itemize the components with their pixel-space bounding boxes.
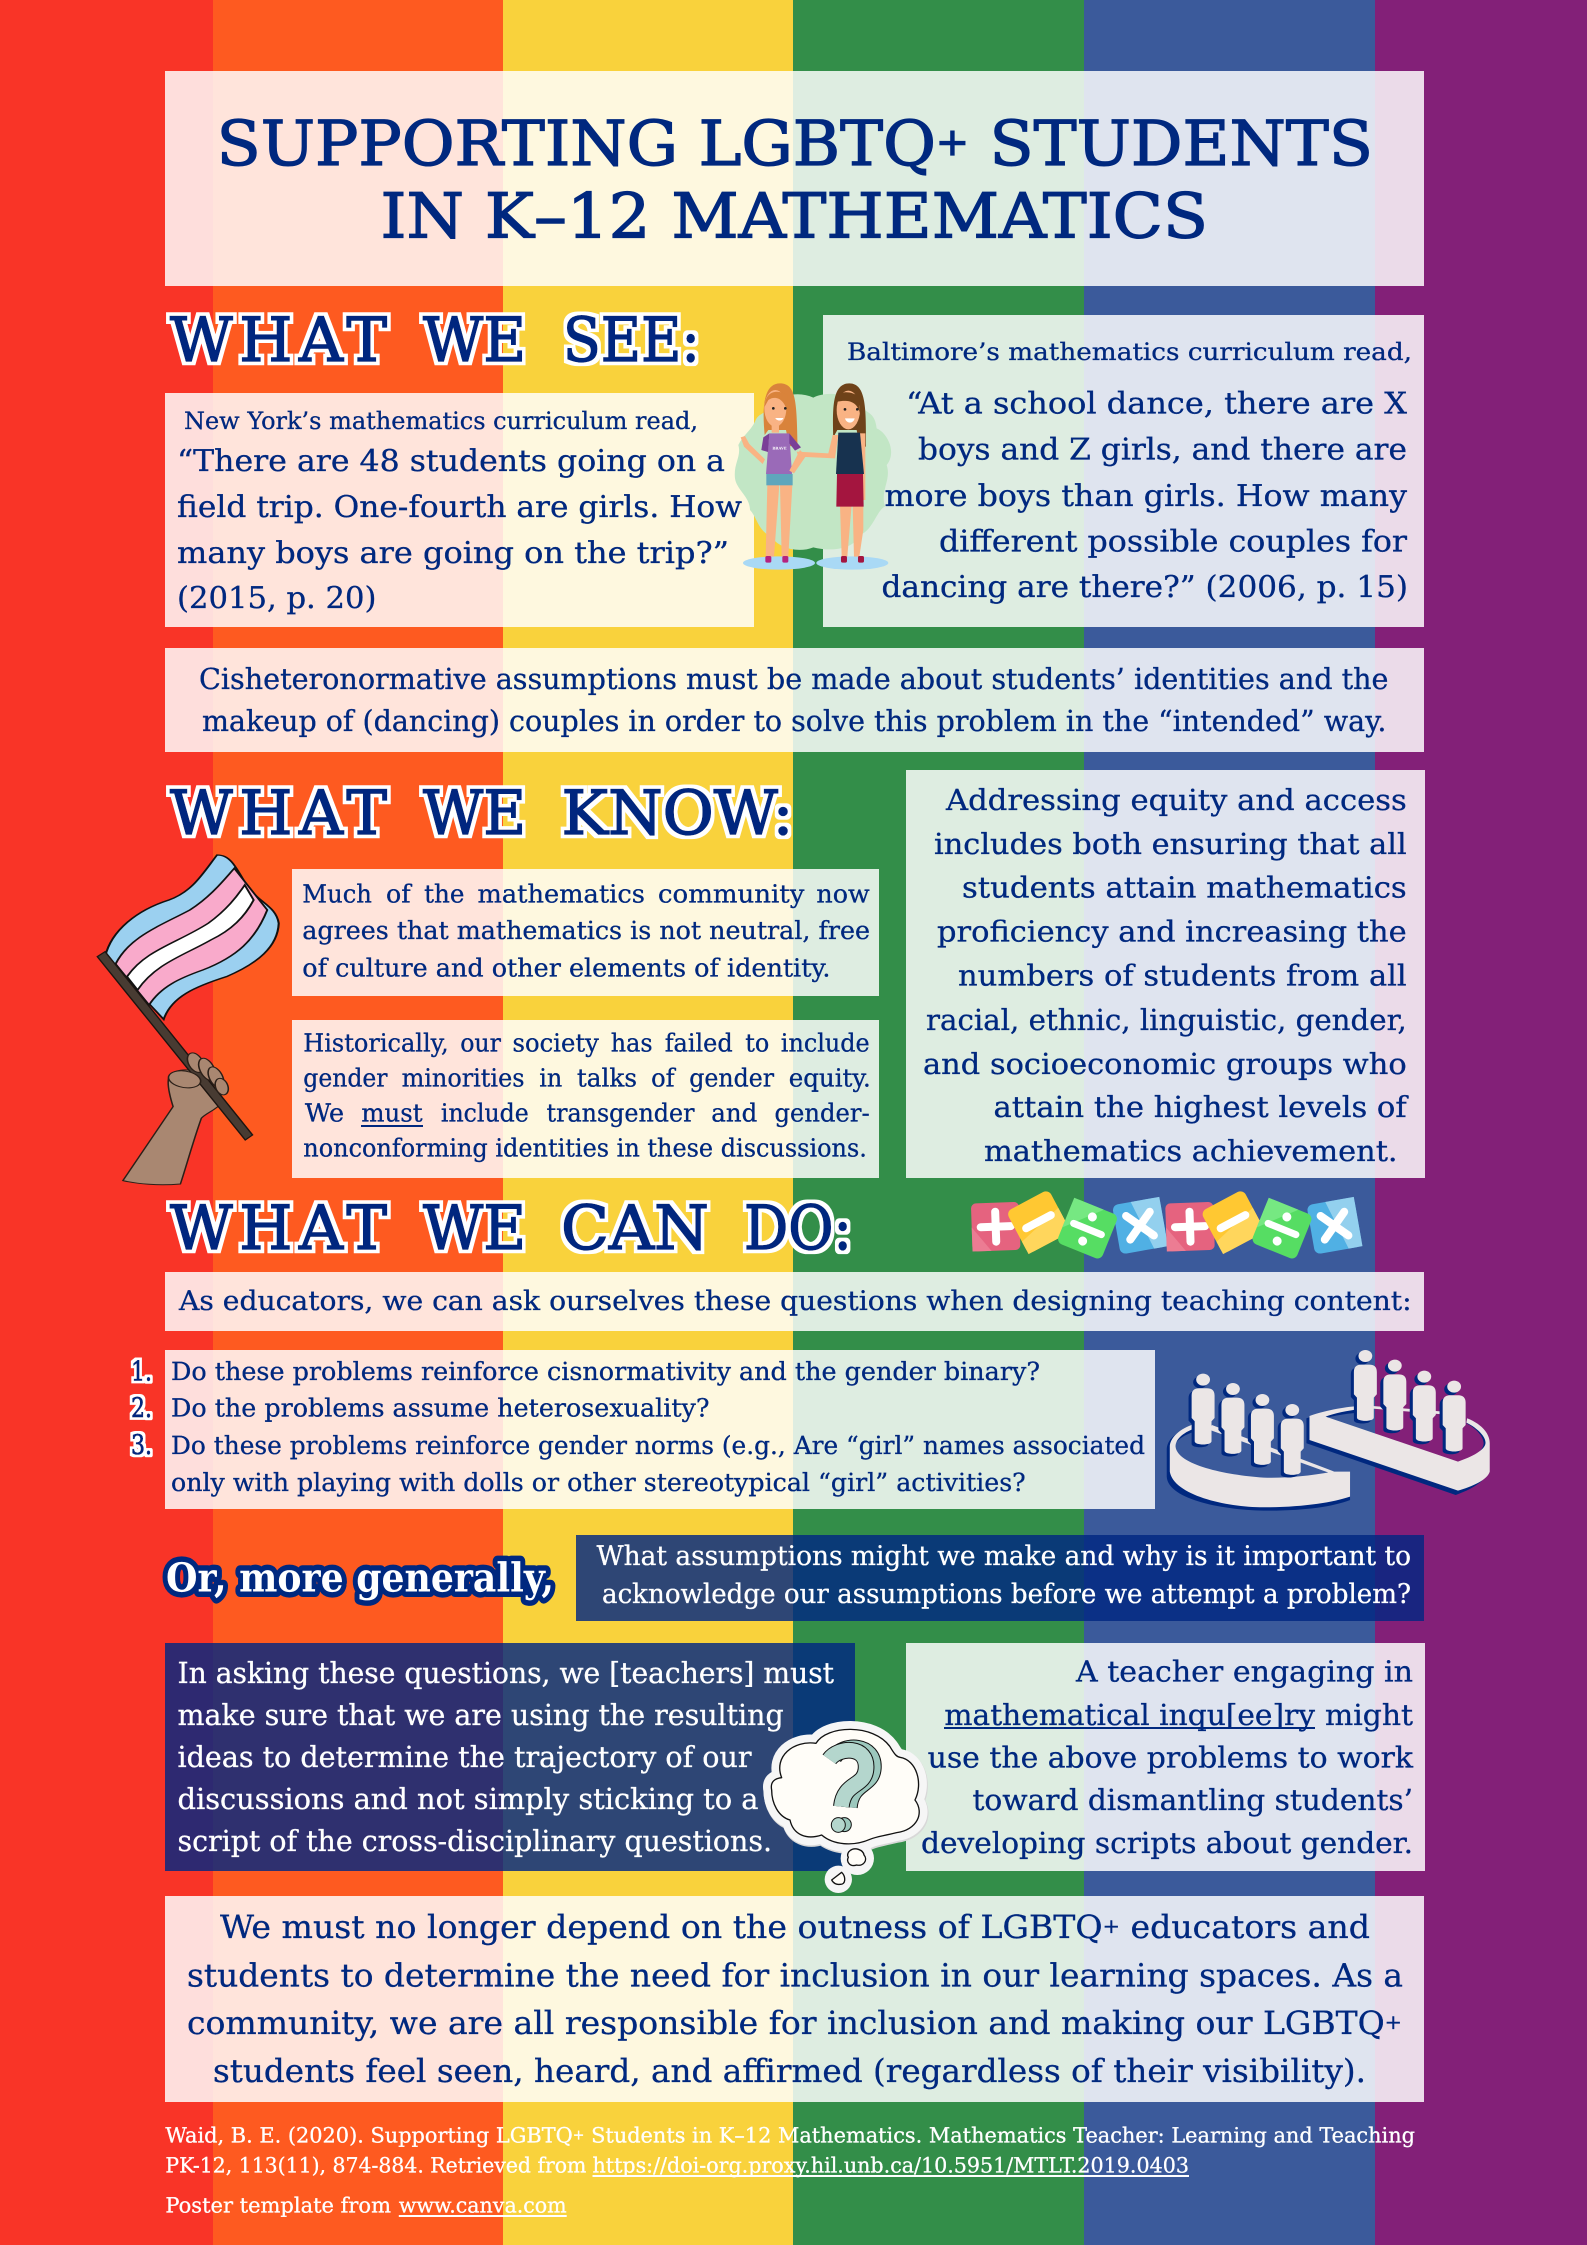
heading: what we can do: WE — [423, 1193, 526, 1264]
heading: what we can do: CAN — [561, 1193, 709, 1264]
callout heading: or, more generally: Or, more generally, — [166, 1555, 554, 1602]
panel: closing statement: educators and — [1120, 1908, 1370, 1946]
numbered markers: 2. — [131, 1393, 152, 1424]
panel: asking these questions — [165, 1643, 855, 1871]
girl two — [797, 383, 866, 563]
panel: gender minorities in equity talks: gender — [689, 1064, 774, 1092]
title: + — [936, 120, 969, 164]
title — [165, 71, 1424, 286]
panel: question list: only with playing with dolls or other stereotypical “girl” activities? — [171, 1468, 1026, 1497]
heading: what we see — [170, 305, 700, 376]
panel: equity and access: and socioeconomic groups who — [923, 1047, 1407, 1081]
panel: New York curriculum quote — [165, 393, 754, 627]
panel: closing statement: + — [1103, 1914, 1120, 1938]
panel: mathematical inqueery — [906, 1643, 1425, 1871]
panel: mathematics is not neutral: Much — [302, 880, 372, 909]
heading: what we see: SEE: — [563, 305, 700, 376]
panel: gender minorities in equity talks: include — [441, 1098, 529, 1128]
citation footer: Poster template from — [165, 2194, 391, 2218]
panel: mathematics is not neutral: the — [424, 880, 464, 909]
panel: equity and access: racial, ethnic, linguistic, gender, — [926, 1003, 1407, 1037]
title: STUDENTS — [969, 107, 1373, 180]
panel: cisheteronormative assumptions: Cisheteronormative assumptions must be made about students’ identities and the — [199, 662, 1388, 696]
panel: assumptions question: What assumptions might we make and why is it important to — [596, 1541, 1411, 1572]
panel: gender minorities in equity talks: Historically, — [303, 1028, 449, 1058]
numbered markers: 3. — [131, 1430, 152, 1461]
heading: what we see: WHAT — [170, 305, 387, 376]
citation footer: www.canva.com — [399, 2194, 567, 2218]
citation footer: PK-12, 113(11), 874-884. Retrieved from — [165, 2154, 586, 2178]
panel: Baltimore curriculum quote: more boys than girls. How many — [884, 479, 1407, 514]
panel: gender minorities in equity talks: and — [711, 1098, 757, 1128]
panel: equity and access: numbers of students from all — [958, 959, 1407, 993]
panel: Baltimore curriculum quote: boys and Z girls, and there are — [918, 432, 1407, 468]
icon: thought bubble with question mark — [771, 1729, 920, 1893]
panel: mathematics is not neutral: of — [386, 880, 412, 909]
panel: asking these questions: script of the cross-disciplinary questions. — [178, 1824, 772, 1858]
icon: two groups of people on platforms — [1167, 1350, 1490, 1511]
numbered markers: 1. — [131, 1357, 152, 1388]
heading: what we can do: WHAT — [170, 1193, 387, 1264]
citation footer: Students in K–12 Mathematics. Mathematics Teacher: Learning and Teaching — [584, 2124, 1415, 2148]
icon: two students — [735, 383, 891, 570]
panel: equity and access: Addressing equity and access — [945, 783, 1407, 817]
panel: gender minorities in equity talks: our — [460, 1028, 501, 1058]
panel: equity and access: students attain mathematics — [962, 871, 1407, 905]
panel: gender minorities in equity talks: in — [539, 1064, 562, 1092]
panel: cisheteronormative assumptions — [165, 648, 1424, 752]
panel: asking these questions: ideas to determine the trajectory of our — [178, 1740, 752, 1774]
panel: assumptions question — [576, 1535, 1424, 1621]
girl one — [741, 383, 806, 563]
panel: equity and access: includes both ensuring that all — [934, 827, 1407, 861]
panel: New York curriculum quote: New York’s mathematics curriculum read, — [184, 407, 698, 435]
panel: gender minorities in equity talks: failed — [665, 1028, 733, 1058]
heading: what we can do: DO: — [744, 1193, 852, 1264]
panel: gender minorities in equity talks: nonconforming identities in these discussions. — [303, 1134, 867, 1162]
panel: Baltimore curriculum quote — [823, 315, 1424, 627]
numbered markers — [131, 1357, 152, 1461]
panel: closing statement: students to determine the need for inclusion in our learning spaces. As a — [187, 1957, 1403, 1995]
icon: row of math operator tiles — [971, 1189, 1362, 1260]
panel: assumptions question: acknowledge our assumptions before we attempt a problem? — [602, 1579, 1411, 1610]
panel: Baltimore curriculum quote: dancing are there?” (2006, p. 15) — [882, 570, 1408, 605]
panel: mathematics is not neutral: of culture and other elements of identity. — [302, 954, 830, 982]
panel: mathematical inqueery: developing scripts about gender. — [921, 1826, 1413, 1860]
panel: Baltimore curriculum quote: Baltimore’s mathematics curriculum read, — [847, 338, 1412, 366]
citation footer: https://doi-org.proxy.hil.unb.ca/10.5951/MTLT.2019.0403 — [592, 2154, 1189, 2178]
panel: gender minorities in equity talks: include — [781, 1028, 870, 1058]
panel: closing statement: students feel seen, heard, and affirmed (regardless of their visibility). — [213, 2052, 1366, 2090]
panel: question list — [165, 1350, 1155, 1509]
panel: question list: Do the problems assume heterosexuality? — [171, 1394, 710, 1423]
panel: equity and access: proficiency and increasing the — [937, 915, 1407, 949]
title: SUPPORTING LGBTQ — [217, 107, 909, 180]
heading: what we know: WE — [423, 778, 526, 849]
panel: Baltimore curriculum quote: “At a school dance, there are X — [906, 386, 1408, 422]
panel: New York curriculum quote: many boys are going on the trip?” — [177, 536, 729, 571]
panel: gender minorities in equity talks: equity. — [789, 1064, 871, 1092]
icon: hand holding transgender pride flag — [97, 855, 279, 1185]
panel: gender minorities in equity talks — [292, 1020, 879, 1178]
panel: mathematics is not neutral — [292, 869, 879, 996]
panel: gender minorities in equity talks: to — [745, 1028, 769, 1058]
panel: gender minorities in equity talks: We — [305, 1098, 344, 1128]
panel: mathematical inqueery: might — [1325, 1698, 1413, 1732]
heading: what we know — [170, 778, 794, 849]
citation footer — [165, 2124, 1415, 2218]
panel: closing statement: + — [1385, 2010, 1402, 2034]
panel: New York curriculum quote: (2015, p. 20) — [177, 581, 376, 616]
panel: question list: Do these problems reinforce cisnormativity and the gender binary? — [171, 1357, 1040, 1386]
panel: educators prompt — [165, 1272, 1424, 1331]
shirt print: BRAVE — [772, 446, 787, 450]
panel: asking these questions: discussions and not simply sticking to a — [178, 1782, 758, 1816]
panel: closing statement — [165, 1896, 1424, 2102]
heading: what we see: WE — [423, 305, 526, 376]
panel: gender minorities in equity talks: gender — [303, 1064, 388, 1092]
citation footer: + — [573, 2128, 584, 2144]
panel: equity and access — [906, 770, 1425, 1178]
title: IN K–12 MATHEMATICS — [380, 180, 1208, 252]
panel: mathematics is not neutral: mathematics — [478, 880, 645, 909]
panel: question list: Do these problems reinforce gender norms (e.g., Are “girl” names associated — [171, 1431, 1145, 1460]
heading: what we can do — [170, 1193, 852, 1264]
heading: what we know: KNOW: — [562, 778, 794, 849]
panel: equity and access: attain the highest levels of — [994, 1090, 1409, 1124]
panel: New York curriculum quote: field trip. One-fourth are girls. How — [177, 490, 742, 525]
panel: gender minorities in equity talks: has — [611, 1028, 653, 1058]
panel: gender minorities in equity talks: transgender — [546, 1098, 695, 1128]
panel: mathematics is not neutral: agrees that mathematics is not neutral, free — [302, 916, 870, 945]
panel: mathematical inqueery: toward dismantling students’ — [972, 1783, 1413, 1817]
panel: gender minorities in equity talks: society — [512, 1028, 600, 1058]
panel: cisheteronormative assumptions: makeup of (dancing) couples in order to solve this problem in the “intended” way. — [202, 704, 1386, 738]
heading: what we know: WHAT — [170, 778, 387, 849]
panel: closing statement: We must no longer depend on the outness of LGBTQ — [220, 1908, 1072, 1946]
panel: Baltimore curriculum quote: different possible couples for — [939, 525, 1408, 560]
citation footer: Waid, B. E. (2020). Supporting LGBTQ — [165, 2124, 575, 2148]
panel: gender minorities in equity talks: must — [361, 1098, 423, 1128]
panel: mathematical inqueery: mathematical inqu[ee]ry — [944, 1698, 1316, 1732]
panel: gender minorities in equity talks: gender- — [774, 1098, 870, 1128]
panel: mathematical inqueery: use the above problems to work — [928, 1741, 1413, 1775]
panel: gender minorities in equity talks: talks — [577, 1064, 637, 1092]
panel: New York curriculum quote: “There are 48 students going on a — [177, 444, 725, 479]
panel: mathematical inqueery: A teacher engaging in — [1075, 1655, 1413, 1689]
panel: educators prompt: As educators, we can ask ourselves these questions when designing teaching content: — [178, 1286, 1412, 1317]
panel: gender minorities in equity talks: of — [651, 1064, 676, 1092]
panel: mathematics is not neutral: now — [816, 880, 870, 909]
panel: asking these questions: In asking these questions, we [teachers] must — [178, 1656, 834, 1690]
panel: gender minorities in equity talks: minorities — [402, 1064, 524, 1092]
panel: closing statement: community, we are all responsible for inclusion and making our LGBTQ — [187, 2004, 1347, 2042]
panel: equity and access: mathematics achievement. — [984, 1134, 1398, 1168]
panel: mathematics is not neutral: community — [658, 880, 805, 909]
panel: asking these questions: make sure that we are using the resulting — [178, 1698, 784, 1732]
